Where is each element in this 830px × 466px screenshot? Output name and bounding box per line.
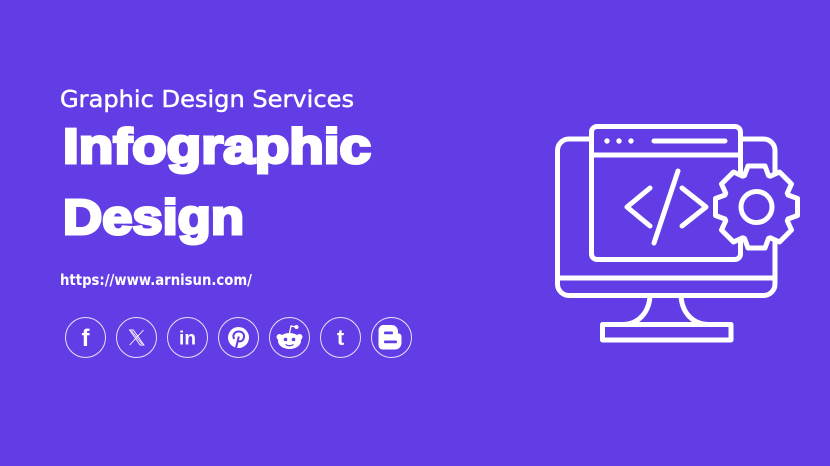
icon: monitor with code window and gear: [558, 126, 798, 340]
icon: pinterest: [218, 318, 258, 358]
monitor stand: [602, 296, 731, 340]
subtitle: Graphic Design Services: [60, 87, 354, 113]
icon: facebook: [66, 318, 106, 358]
icon: reddit: [270, 318, 310, 358]
title: Design: [63, 191, 244, 245]
icon: linkedin: [168, 318, 208, 358]
monitor body: [558, 139, 775, 296]
social icons row: [66, 318, 412, 358]
icon: blogger: [372, 318, 412, 358]
code symbol: [627, 171, 706, 243]
gear: [716, 166, 798, 248]
icon: linkedin: in: [179, 328, 196, 350]
window dots: [604, 138, 634, 144]
icon: tumblr: t: [337, 325, 345, 350]
title: [63, 120, 371, 245]
title: Infographic: [63, 120, 371, 174]
website url: https://www.arnisun.com/: [60, 271, 252, 289]
icon: facebook: f: [82, 325, 90, 352]
icon: x: [116, 318, 156, 358]
icon: tumblr: [320, 318, 360, 358]
window address bar: [654, 138, 725, 144]
browser window: [592, 126, 740, 260]
